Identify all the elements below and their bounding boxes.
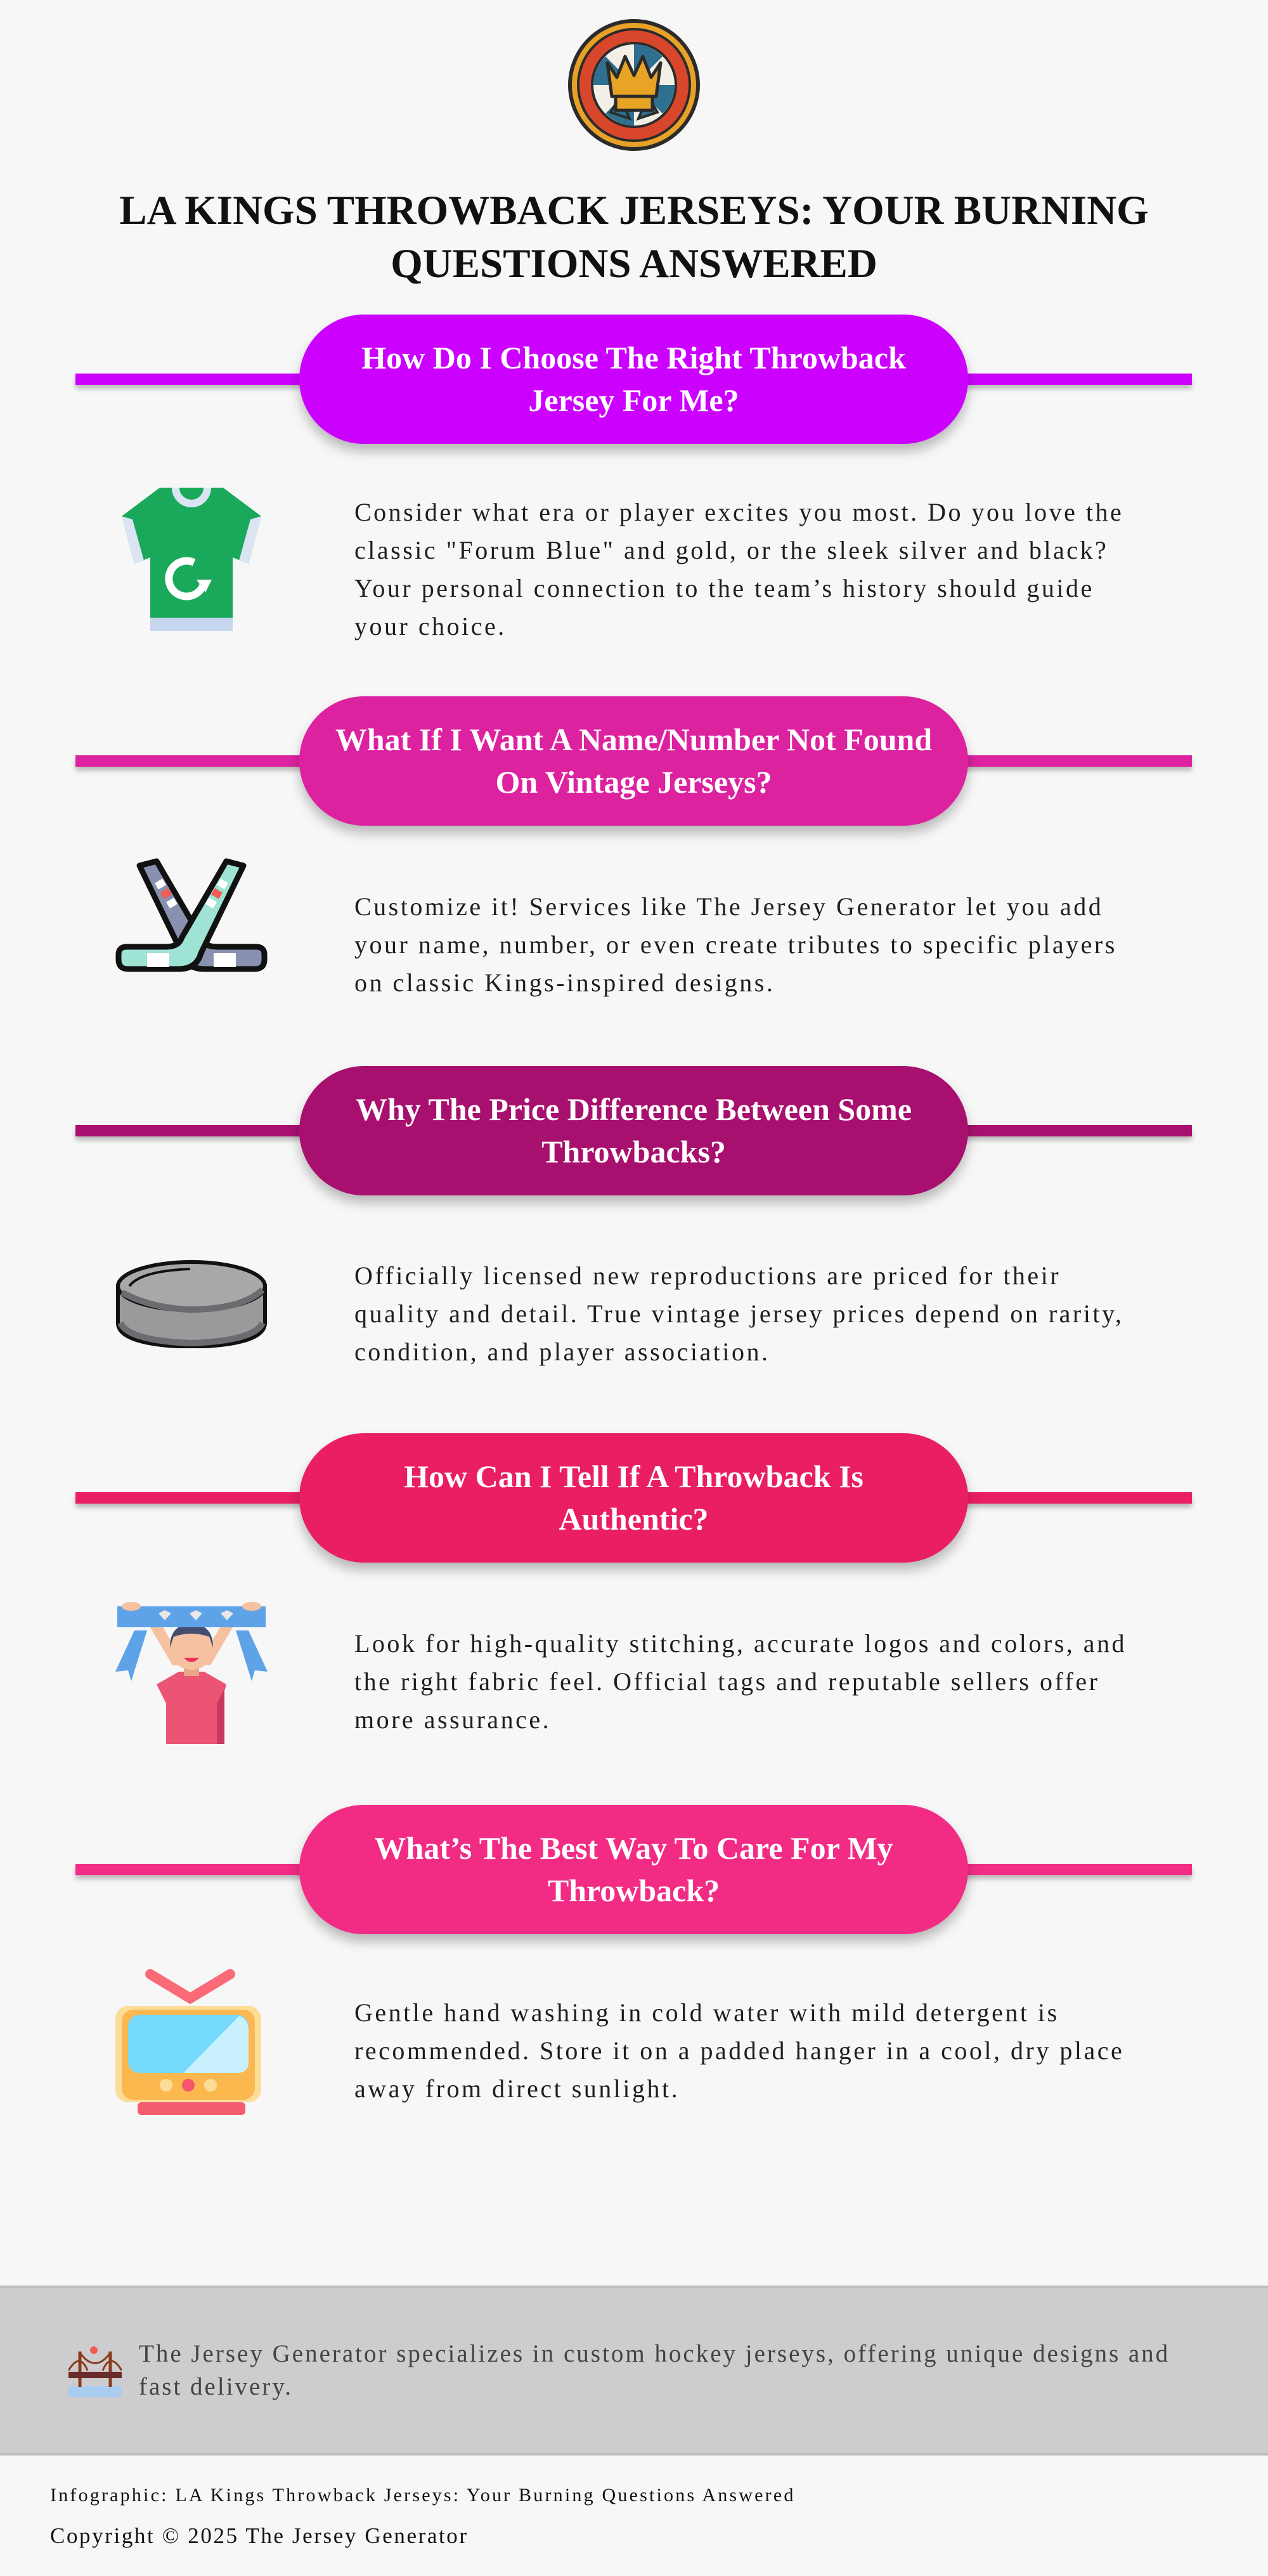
text: section 4: the right fabric feel. Official tags and reputable sellers offer (354, 1667, 1099, 1696)
heading: section 4: Authentic? (559, 1501, 709, 1537)
text: section 5: away from direct sunlight. (354, 2074, 680, 2103)
heading: section 5: What’s The Best Way To Care For My (374, 1830, 893, 1866)
text: section 1: classic "Forum Blue" and gold, or the sleek silver and black? (354, 536, 1108, 564)
text: section 5: Gentle hand washing in cold water with mild detergent is (354, 1998, 1059, 2027)
text: footer blurb: fast delivery. (139, 2373, 293, 2400)
text: section 2: on classic Kings-inspired designs. (354, 968, 775, 997)
heading: section 3: Throwbacks? (541, 1134, 726, 1169)
text: section 3 (354, 1261, 1123, 1366)
text: section 1: Your personal connection to the team’s history should guide (354, 574, 1094, 602)
text: footer blurb (139, 2340, 1170, 2400)
icon: bridge (68, 2346, 122, 2397)
heading: section 2 (299, 696, 968, 826)
text: section 3: Officially licensed new reproductions are priced for their (354, 1261, 1061, 1290)
text: footer blurb: The Jersey Generator specializes in custom hockey jerseys, offering unique designs and (139, 2340, 1170, 2367)
text: section 4: more assurance. (354, 1705, 551, 1734)
heading: section 1: Jersey For Me? (528, 382, 739, 418)
heading: section 1: How Do I Choose The Right Throwback (361, 340, 906, 375)
footer credits: Infographic: LA Kings Throwback Jerseys: Your Burning Questions Answered (50, 2485, 796, 2506)
title: QUESTIONS ANSWERED (391, 241, 877, 287)
heading: section 3: Why The Price Difference Between Some (356, 1091, 912, 1127)
heading: section 4: How Can I Tell If A Throwback Is (404, 1459, 864, 1494)
text: section 3: quality and detail. True vintage jersey prices depend on rarity, (354, 1299, 1123, 1328)
text: section 4: Look for high-quality stitching, accurate logos and colors, and (354, 1629, 1127, 1658)
text: section 2 (354, 892, 1117, 997)
title: LA KINGS THROWBACK JERSEYS: YOUR BURNING (119, 188, 1149, 233)
text: section 1: Consider what era or player excites you most. Do you love the (354, 498, 1123, 526)
footer credits (50, 2485, 796, 2548)
icon: fan with banner (115, 1602, 268, 1744)
heading: section 4 (299, 1433, 968, 1563)
icon: puck (116, 1260, 267, 1348)
icon: tv (115, 1969, 261, 2115)
text: section 1: your choice. (354, 612, 507, 641)
heading: section 3 (299, 1066, 968, 1195)
heading: section 2: On Vintage Jerseys? (495, 764, 772, 800)
heading: section 2: What If I Want A Name/Number Not Found (335, 722, 932, 757)
logo (568, 19, 700, 151)
text: section 5: recommended. Store it on a padded hanger in a cool, dry place (354, 2036, 1124, 2065)
text: section 1 (354, 498, 1123, 641)
icon: hockey sticks (115, 859, 268, 972)
title (119, 188, 1149, 287)
heading: section 5: Throwback? (548, 1873, 720, 1908)
text: section 2: your name, number, or even create tributes to specific players (354, 930, 1117, 959)
text: section 2: Customize it! Services like The Jersey Generator let you add (354, 892, 1103, 921)
text: section 3: condition, and player association. (354, 1337, 770, 1366)
heading: section 5 (299, 1805, 968, 1934)
footer credits: Copyright © 2025 The Jersey Generator (50, 2523, 469, 2548)
text: section 5 (354, 1998, 1124, 2103)
footer band (0, 2286, 1268, 2456)
heading: section 1 (299, 315, 968, 444)
text: section 4 (354, 1629, 1127, 1734)
icon: jersey (122, 488, 261, 631)
